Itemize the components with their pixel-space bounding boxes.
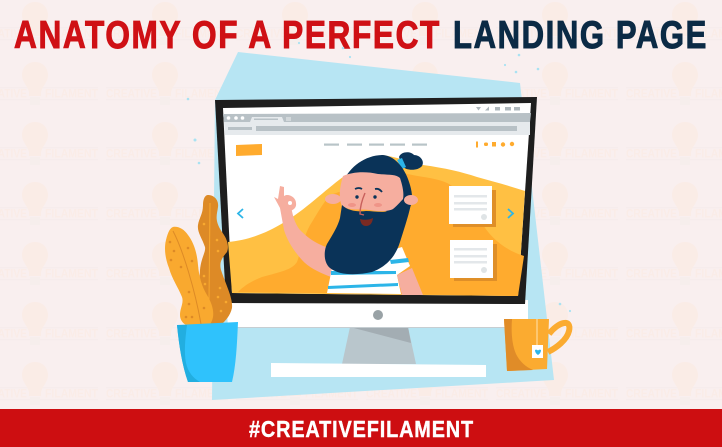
browser status icons [476,106,520,110]
footer bar [0,409,722,447]
content card top [449,186,496,227]
scattered blue dots [187,42,571,312]
face [340,172,403,211]
hero wave dark [238,172,524,296]
browser tab bar [223,113,531,122]
monitor bezel [215,97,537,304]
raised arm and hand [274,186,333,277]
monitor screen [223,103,531,296]
shirt [327,247,410,294]
light blue backdrop shape [212,52,554,400]
bearded man [274,152,423,295]
monitor chin [226,300,528,328]
right ear [404,195,418,205]
tea bag [532,319,543,358]
title: ANATOMY OF A PERFECT [14,14,441,57]
navigation bars [324,144,427,146]
beard [325,198,411,274]
mouth [360,218,373,226]
other arm [397,268,423,295]
eyes and brows [355,188,382,199]
hair [343,155,412,215]
mug handle [548,323,569,352]
carousel arrow right [508,209,513,218]
nose [360,193,365,215]
cheeks [348,203,382,207]
browser address bar [224,122,530,135]
ears [325,194,341,204]
footer bar: #CREATIVEFILAMENT [249,416,474,442]
mug body [504,319,549,371]
monitor stand [342,327,416,364]
logo placeholder [236,144,262,156]
front leaf [165,227,213,326]
tea mug [504,319,569,371]
social icons [476,142,514,148]
hero wave light [228,155,525,296]
pot [177,322,238,382]
bun and hair tie [397,152,423,170]
back leaf [198,195,232,325]
carousel arrow left [238,209,243,218]
mug shade [504,319,533,371]
potted plant [165,195,238,382]
content card bottom [450,240,497,281]
monitor base [271,363,486,377]
